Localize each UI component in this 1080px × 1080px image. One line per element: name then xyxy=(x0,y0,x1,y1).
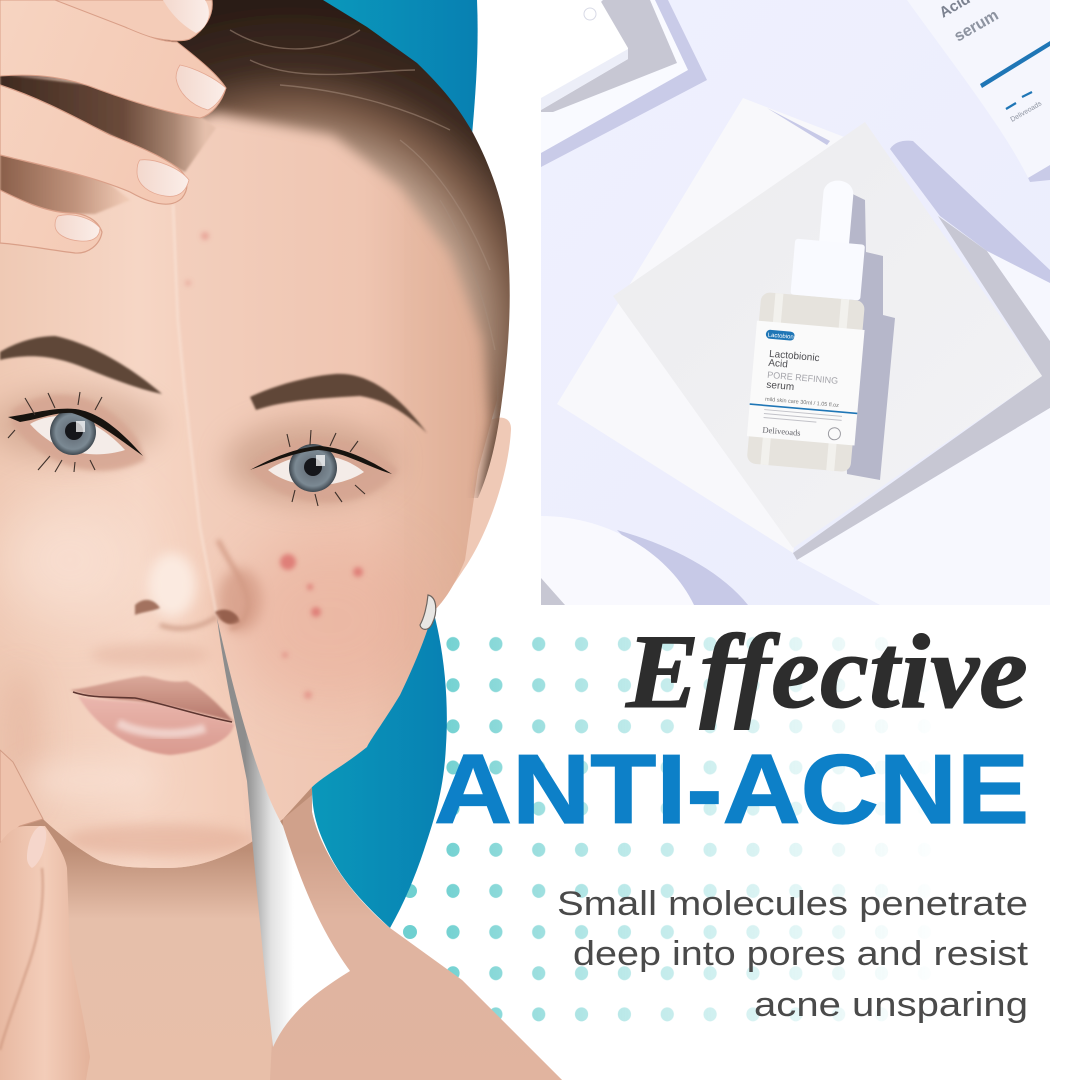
top-right box: Deliveoads xyxy=(1010,100,1043,124)
main square sheet xyxy=(613,122,1042,548)
face skin xyxy=(0,60,520,890)
hair xyxy=(0,0,510,498)
hand: bottom fingers xyxy=(0,750,90,1080)
ear xyxy=(430,418,511,612)
peel seam xyxy=(173,205,217,618)
bottle label: Acid xyxy=(768,358,788,370)
headline: ANTI-ACNE: ANTI-ACNE xyxy=(434,734,1029,844)
earring xyxy=(420,595,436,629)
acne spots xyxy=(185,232,363,699)
right eyebrow xyxy=(250,374,427,433)
shadow gap lower xyxy=(0,152,130,214)
left eye xyxy=(8,392,145,472)
neck shadow right xyxy=(270,795,562,1080)
bottle shadow xyxy=(838,187,895,480)
nose xyxy=(135,540,248,628)
index finger xyxy=(0,0,212,41)
lips xyxy=(70,676,234,755)
bottle label xyxy=(747,321,865,446)
teal shape: bottom xyxy=(312,610,447,928)
product photo xyxy=(541,0,1050,605)
top-right box xyxy=(942,0,1050,182)
bottom-left circle xyxy=(541,516,748,605)
white sliver right xyxy=(987,251,1050,341)
description text: deep into pores and resist xyxy=(573,935,1029,973)
bottle label: mild skin care 30ml / 1.05 fl.oz xyxy=(765,397,839,409)
left eyebrow xyxy=(0,336,162,394)
dropper bulb xyxy=(819,179,854,245)
dropper collar xyxy=(790,239,865,301)
upper-right shadow xyxy=(890,141,1050,285)
serum bottle xyxy=(747,180,865,472)
gray band xyxy=(793,216,1050,560)
top-right box: serum xyxy=(952,7,1002,45)
lilac sliver xyxy=(767,108,830,145)
bottle glass xyxy=(747,292,865,472)
description text xyxy=(557,885,1029,1024)
hand: top fingers xyxy=(0,0,226,253)
peeled skin flap xyxy=(217,618,350,1047)
bottle label: Lactobionic xyxy=(769,349,820,364)
bottle label: Deliveoads xyxy=(762,425,801,438)
white lower plane xyxy=(797,408,1050,605)
dark gap between fingers xyxy=(0,74,216,172)
description text: acne unsparing xyxy=(754,986,1028,1024)
rear sheet xyxy=(557,98,865,553)
bottle label: serum xyxy=(766,380,795,393)
neck and chest xyxy=(0,780,562,1080)
teal shape: top xyxy=(320,0,478,135)
top-left box and tray xyxy=(541,0,707,167)
bottle label: Lactobionic xyxy=(767,333,798,341)
portrait xyxy=(0,0,600,1080)
dot pattern xyxy=(403,636,888,1022)
description text: Small molecules penetrate xyxy=(557,885,1028,923)
right eye xyxy=(250,430,398,506)
headline: Effective: Effective xyxy=(625,613,1028,730)
bottle label: PORE REFINING xyxy=(767,370,839,386)
